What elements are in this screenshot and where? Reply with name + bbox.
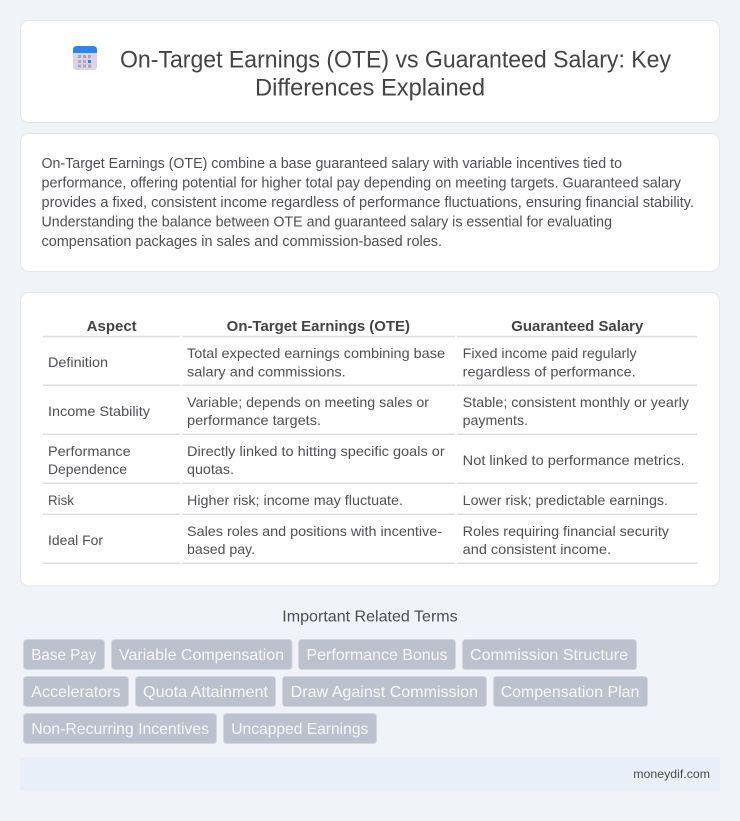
row: ideal for bbox=[48, 523, 669, 557]
row: income stability: Stable; consistent monthly or yearly bbox=[463, 394, 689, 410]
panel: comparison table bbox=[20, 292, 720, 586]
row: risk: Risk bbox=[48, 492, 75, 508]
row: ideal for: Ideal For bbox=[48, 532, 103, 548]
tag: Uncapped Earnings bbox=[224, 714, 376, 744]
row: performance dependence bbox=[48, 443, 685, 477]
row: definition: Definition bbox=[48, 354, 108, 370]
row: definition: regardless of performance. bbox=[463, 364, 636, 380]
tag: Uncapped Earnings: Uncapped Earnings bbox=[231, 721, 368, 738]
row: definition bbox=[48, 345, 637, 380]
row: income stability: payments. bbox=[463, 412, 528, 428]
tag: Variable Compensation bbox=[112, 640, 292, 670]
row: risk: Lower risk; predictable earnings. bbox=[463, 492, 668, 508]
tag: Performance Bonus bbox=[298, 640, 456, 670]
row: ideal for: Roles requiring financial security bbox=[463, 523, 669, 539]
row: income stability: Variable; depends on meeting sales or bbox=[187, 394, 429, 410]
title bbox=[120, 46, 671, 102]
tag: Base Pay bbox=[24, 640, 104, 670]
table header: Guaranteed Salary bbox=[511, 319, 644, 335]
tag: Variable Compensation: Variable Compensation bbox=[119, 647, 284, 664]
row: performance dependence: Performance bbox=[48, 443, 131, 459]
row: performance dependence: Directly linked to hitting specific goals or bbox=[187, 443, 445, 459]
text block: introduction: provides a fixed, consistent income regardless of performance fluctuations, ensuring financial stability. bbox=[42, 195, 694, 211]
row: risk bbox=[48, 492, 668, 508]
tag: Base Pay: Base Pay bbox=[31, 647, 96, 664]
title: Differences Explained bbox=[255, 74, 485, 102]
tags: related terms bbox=[24, 640, 648, 744]
row: risk: Higher risk; income may fluctuate. bbox=[187, 492, 403, 508]
text block: introduction bbox=[42, 156, 694, 250]
tag: Non-Recurring Incentives: Non-Recurring Incentives bbox=[31, 721, 209, 738]
tag: Accelerators bbox=[24, 676, 128, 706]
row: performance dependence: quotas. bbox=[187, 461, 234, 477]
icon: calendar bbox=[73, 46, 97, 70]
row: ideal for: and consistent income. bbox=[463, 541, 611, 557]
tag: Compensation Plan bbox=[494, 676, 648, 706]
tag: Commission Structure: Commission Structure bbox=[470, 647, 628, 664]
row: definition: salary and commissions. bbox=[187, 364, 346, 380]
table header: On-Target Earnings (OTE) bbox=[227, 319, 410, 335]
tag: Draw Against Commission bbox=[282, 676, 486, 706]
tag: Non-Recurring Incentives bbox=[24, 714, 216, 744]
text block: introduction: performance, offering potential for higher total pay depending on meeting targets. Guaranteed salary bbox=[42, 176, 682, 192]
row: income stability: performance targets. bbox=[187, 412, 321, 428]
tag: Draw Against Commission: Draw Against Commission bbox=[291, 684, 478, 701]
table header bbox=[87, 319, 644, 335]
footer bbox=[20, 757, 720, 791]
tag: Performance Bonus: Performance Bonus bbox=[306, 647, 448, 664]
tag: Compensation Plan: Compensation Plan bbox=[501, 684, 639, 701]
row: ideal for: Sales roles and positions with incentive- bbox=[187, 523, 442, 539]
tag: Quota Attainment: Quota Attainment bbox=[143, 684, 269, 701]
table header: Aspect bbox=[87, 319, 137, 335]
row: performance dependence: Not linked to performance metrics. bbox=[463, 452, 685, 468]
row: definition: Fixed income paid regularly bbox=[463, 345, 637, 361]
row: income stability bbox=[48, 394, 689, 428]
tag: Accelerators: Accelerators bbox=[31, 684, 120, 701]
row: ideal for: based pay. bbox=[187, 541, 255, 557]
tag: Commission Structure bbox=[462, 640, 636, 670]
title: On-Target Earnings (OTE) vs Guaranteed Salary: Key bbox=[120, 46, 671, 74]
row: performance dependence: Dependence bbox=[48, 461, 127, 477]
footer: moneydif.com bbox=[633, 767, 710, 781]
text block: introduction: On-Target Earnings (OTE) combine a base guaranteed salary with variable incentives tied to bbox=[42, 156, 622, 172]
row: income stability: Income Stability bbox=[48, 403, 150, 419]
panel: introduction bbox=[20, 134, 720, 272]
text block: introduction: compensation packages in sales and commission-based roles. bbox=[42, 234, 442, 250]
heading: important related terms: Important Related Terms bbox=[282, 608, 458, 626]
tag: Quota Attainment bbox=[136, 676, 276, 706]
row: definition: Total expected earnings combining base bbox=[187, 345, 445, 361]
text block: introduction: Understanding the balance between OTE and guaranteed salary is essential for evaluating bbox=[42, 214, 612, 230]
panel: header bbox=[20, 20, 720, 122]
